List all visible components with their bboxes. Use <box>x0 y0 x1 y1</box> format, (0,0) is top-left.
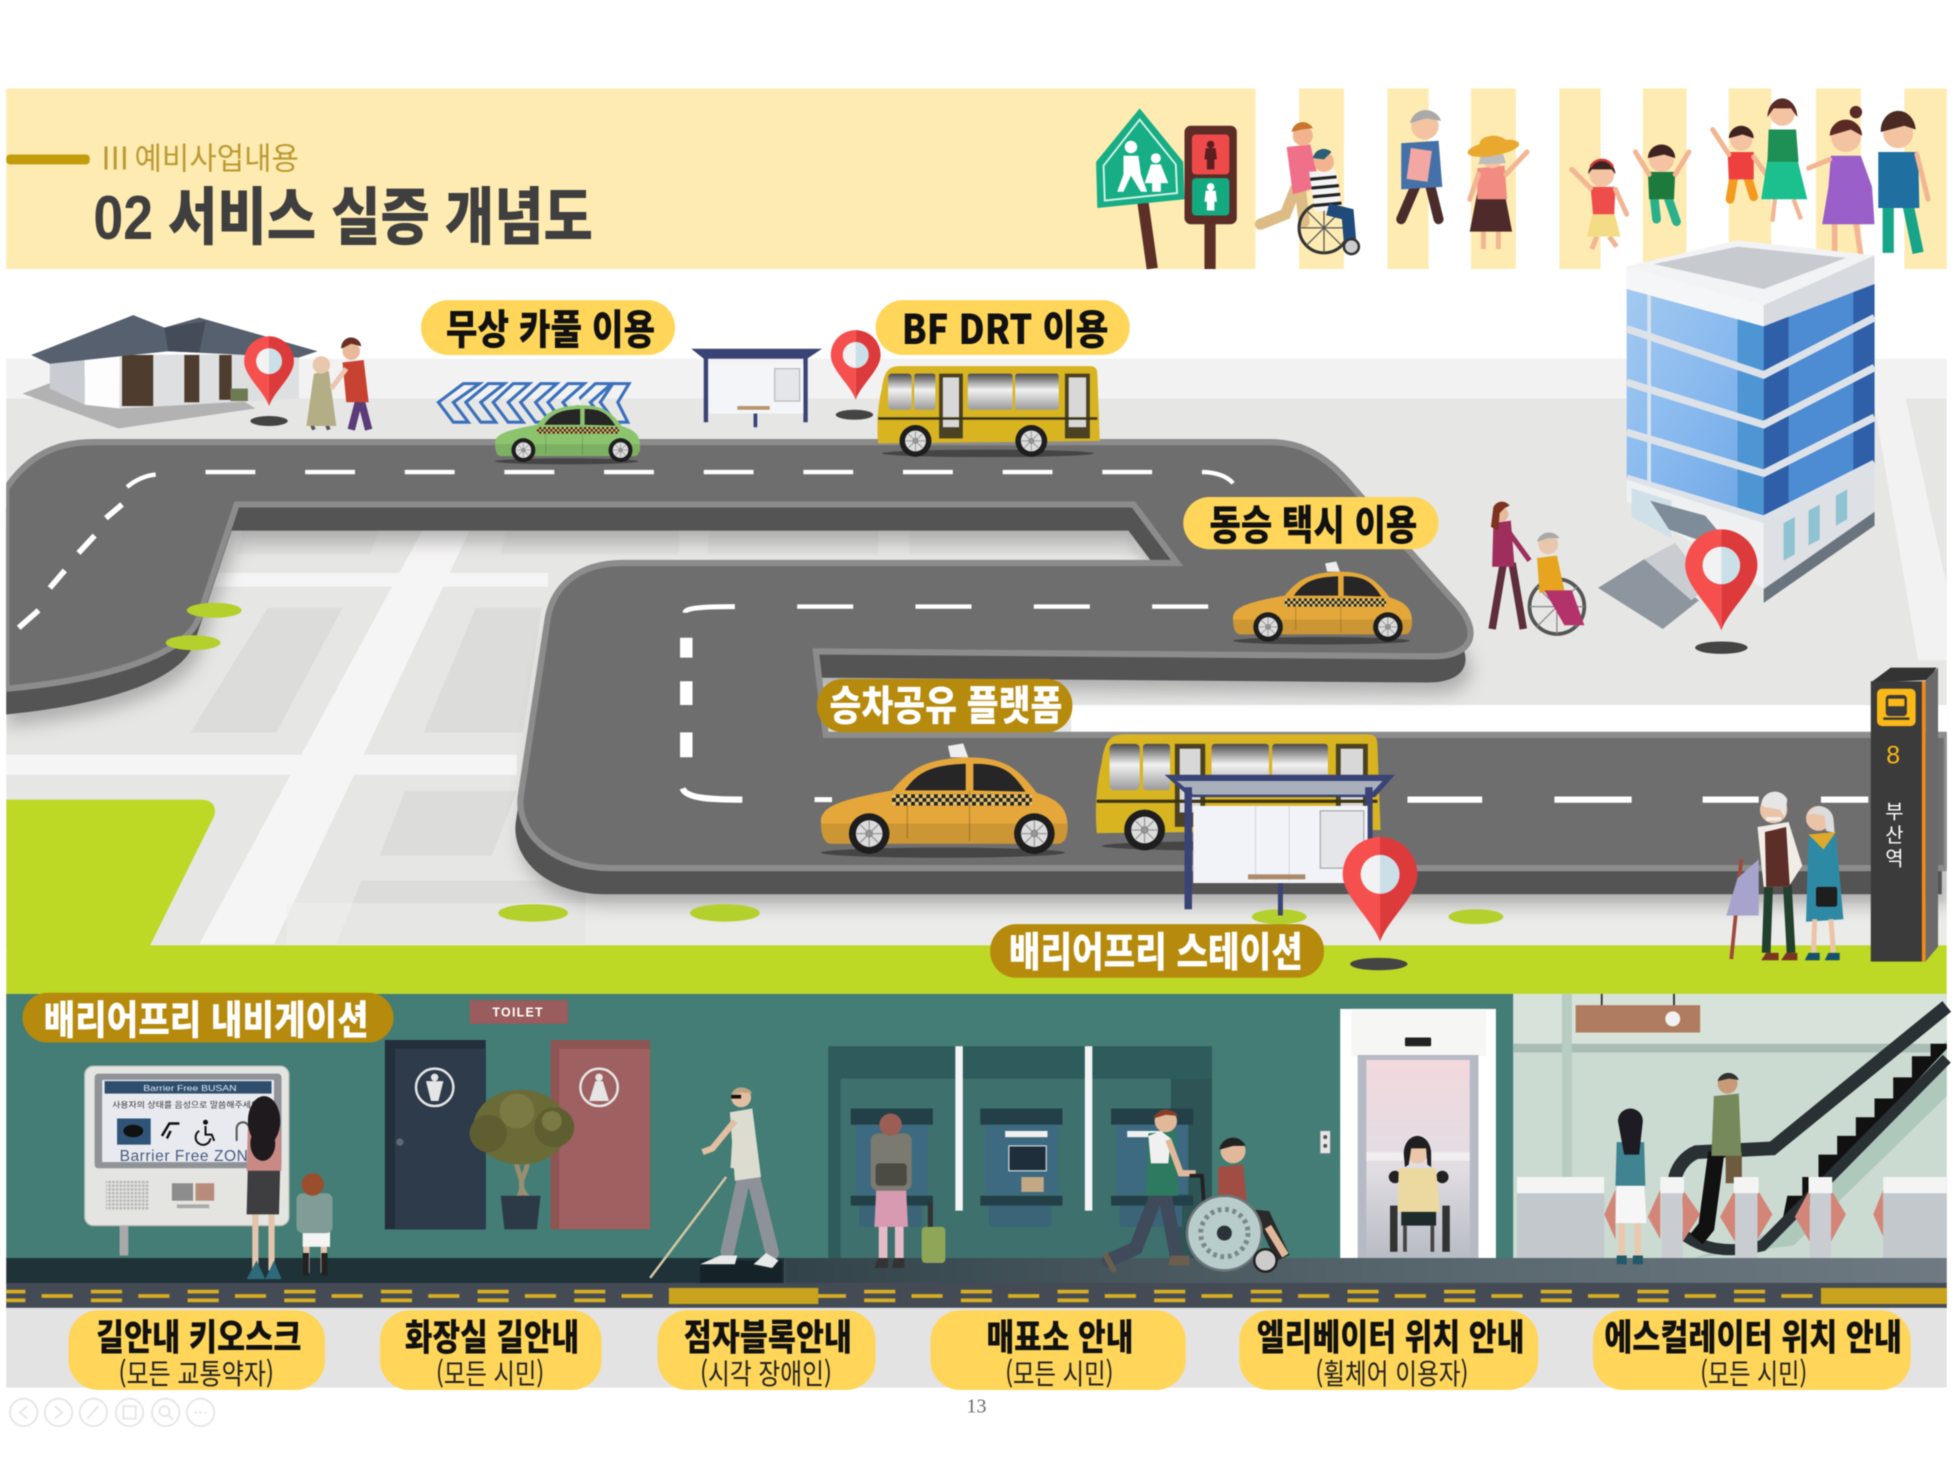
kiosk <box>85 1066 289 1255</box>
building: house <box>22 315 318 428</box>
hanging direction sign <box>1576 994 1700 1033</box>
floor <box>6 1258 1947 1388</box>
section label: Ⅲ <box>100 141 131 176</box>
road base depth <box>1 468 1942 894</box>
pill: shared taxi: 동승 택시 이용 <box>1209 491 1417 551</box>
figure: pregnant woman <box>1809 106 1875 255</box>
figure: girl jumping <box>1572 160 1627 249</box>
section label: 예비사업내용 <box>135 141 299 176</box>
kiosk: 사용자의 상태를 음성으로 말씀해주세요 <box>112 1099 260 1110</box>
caption: toilet guide <box>380 1309 602 1393</box>
figure: boy jumping <box>1635 144 1689 222</box>
caption: escalator: (모든 시민) <box>1700 1352 1807 1393</box>
section marker bar <box>6 154 90 164</box>
figure: traveller with backpack and suitcase <box>871 1114 945 1268</box>
vehicle: yellow bus <box>1096 734 1381 851</box>
figure: elderly couple <box>1726 792 1843 960</box>
caption: escalator <box>1593 1309 1911 1393</box>
figure: woman in green <box>1761 98 1807 222</box>
ticket machine 3 <box>1111 1109 1193 1227</box>
toilet sign <box>470 1000 568 1024</box>
panel: city road map <box>1 359 1947 994</box>
figure: man in blue <box>1878 111 1928 253</box>
caption: wayfinding kiosk: (모든 교통약자) <box>118 1352 274 1393</box>
caption: wayfinding kiosk: 길안내 키오스크 <box>96 1309 301 1361</box>
ground <box>6 359 1947 949</box>
road surface <box>6 442 1947 868</box>
caption: elevator <box>1239 1309 1538 1393</box>
header banner <box>6 88 1947 269</box>
caption: elevator: 엘리베이터 위치 안내 <box>1257 1309 1525 1361</box>
pill: free carpool: 무상 카풀 이용 <box>446 296 655 356</box>
ticket machine 2 <box>980 1109 1062 1227</box>
caption: tactile blocks <box>658 1309 876 1393</box>
caption: ticket office: (모든 시민) <box>1005 1352 1114 1393</box>
building: office tower <box>1598 240 1875 629</box>
page number: 13 <box>967 1395 987 1417</box>
toilet door: women <box>551 1040 650 1229</box>
wall <box>6 994 1513 1259</box>
kiosk: Barrier Free BUSAN <box>143 1083 237 1093</box>
caption: toilet guide: (모든 시민) <box>436 1352 544 1393</box>
figure: woman with sun hat <box>1466 136 1527 249</box>
panel: barrier free navigation <box>6 989 1947 1393</box>
figure: elderly man with helper <box>306 337 369 430</box>
ticket gates <box>1517 1177 1947 1258</box>
ticket office <box>828 1046 1212 1258</box>
pill: BF DRT: BF DRT 이용 <box>902 296 1109 356</box>
location pin: home <box>244 336 294 426</box>
station sign: Busan Station: 부 <box>1885 795 1904 824</box>
road shadow <box>6 480 1947 906</box>
caption: escalator: 에스컬레이터 위치 안내 <box>1604 1309 1902 1361</box>
figure: woman at kiosk <box>247 1096 281 1279</box>
green tree dots <box>166 603 1503 924</box>
green lawn <box>6 800 215 947</box>
caption: ticket office: 매표소 안내 <box>986 1309 1133 1361</box>
caption: tactile blocks: 점자블록안내 <box>684 1309 852 1361</box>
slideshow toolbar icons <box>10 1399 214 1426</box>
vehicle: yellow DRT bus <box>877 366 1100 457</box>
icon: traffic light <box>1185 126 1237 269</box>
bus shelter: small <box>691 349 822 427</box>
toilet door: men <box>385 1040 486 1229</box>
caption: wayfinding kiosk <box>69 1309 325 1393</box>
station sign: Busan Station: 역 <box>1885 843 1904 872</box>
station sign: Busan Station: 산 <box>1885 819 1904 848</box>
figure: elderly man with folder <box>1401 110 1442 219</box>
bus shelter: large <box>1165 775 1395 915</box>
pill: barrier free station: 배리어프리 스테이션 <box>1009 919 1303 979</box>
caption: ticket office <box>930 1309 1186 1393</box>
station sign: Busan Station: 8 <box>1886 742 1900 770</box>
figure: wheelchair user in elevator <box>1389 1136 1449 1252</box>
escalator <box>1674 1006 1947 1258</box>
elevator <box>1320 1009 1496 1258</box>
road centre dashes <box>19 472 1868 800</box>
icon: school zone sign <box>1096 108 1185 269</box>
figure: blind man with cane <box>650 1087 778 1278</box>
icon: blue chevrons <box>438 384 629 422</box>
caption: elevator: (휠체어 이용자) <box>1315 1352 1468 1393</box>
icon: train <box>1877 689 1916 726</box>
figure: man on escalator <box>1696 1073 1741 1239</box>
location pin: office <box>1685 529 1757 654</box>
figure: caregiver with elderly wheelchair user <box>1491 502 1584 634</box>
green strip <box>6 945 1947 994</box>
ticket machine 1 <box>851 1109 933 1227</box>
vehicle: large taxi <box>821 743 1068 858</box>
caption: toilet guide: 화장실 길안내 <box>405 1309 579 1361</box>
potted plant <box>470 1090 574 1229</box>
vehicle: small taxi <box>1233 562 1412 644</box>
figure: child with backpack <box>296 1173 333 1275</box>
pill: navigation heading: 배리어프리 내비게이션 <box>44 989 369 1046</box>
location pin: bus stop <box>831 330 881 420</box>
title: 02 서비스 실증 개념도 <box>93 184 593 253</box>
figure: man pushing wheelchair user <box>1102 1110 1285 1273</box>
figure: caregiver pushing wheelchair <box>1260 122 1359 254</box>
figure: boy in red <box>1713 126 1766 199</box>
toilet sign: TOILET <box>492 1005 544 1019</box>
vehicle: green car <box>495 397 640 464</box>
location pin: station <box>1343 837 1417 970</box>
pill: ride sharing platform: 승차공유 플랫폼 <box>830 672 1062 732</box>
station wall <box>1513 994 1947 1259</box>
station sign: Busan Station <box>1871 668 1938 962</box>
caption: tactile blocks: (시각 장애인) <box>700 1352 832 1393</box>
figure: woman at gate <box>1615 1109 1647 1264</box>
kiosk: Barrier Free ZON <box>120 1148 248 1165</box>
